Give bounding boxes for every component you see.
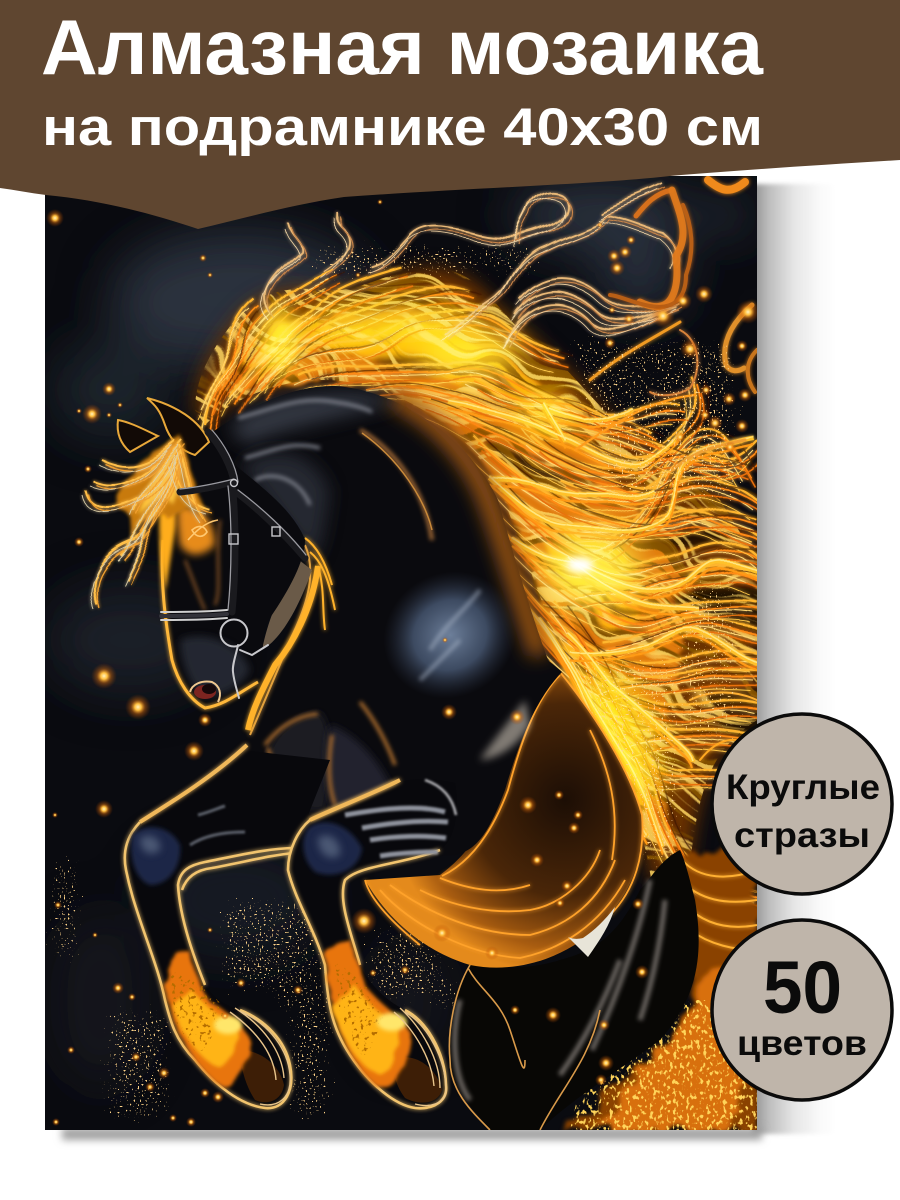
glowing mane mass [195, 268, 757, 885]
badge: 50 colours [712, 920, 892, 1100]
title: Алмазная мозаика [41, 3, 764, 91]
tail flame lower right [560, 840, 757, 1130]
subtitle: на подрамнике 40х30 см [42, 98, 763, 157]
front foreleg [288, 779, 457, 1108]
night background with smoke [45, 176, 757, 1130]
head [159, 438, 305, 708]
badge: round rhinestones: Круглые [726, 768, 880, 807]
ears [118, 398, 209, 455]
painting: fire horse on stretched canvas [45, 176, 757, 1130]
badge: 50 colours: цветов [737, 1024, 867, 1063]
forelock [82, 435, 213, 610]
shadow of canvas [62, 184, 836, 1140]
badge: round rhinestones [712, 714, 892, 894]
hind leg [449, 850, 699, 1130]
hot yellow glow in the mane [260, 306, 676, 812]
hair streak texture [195, 268, 757, 877]
bridle [161, 430, 306, 698]
brown header banner [0, 0, 900, 229]
horse [82, 386, 699, 1130]
flame strands of the mane [198, 186, 770, 922]
badge: round rhinestones: стразы [734, 816, 870, 855]
golden dust [30, 225, 757, 1140]
neck and barrel [195, 386, 562, 860]
right side curling flames [575, 180, 757, 760]
glowing sparks [46, 199, 760, 1127]
rear foreleg [125, 745, 330, 1108]
belly and haunch [365, 670, 643, 968]
badge: 50 colours: 50 [763, 946, 842, 1029]
